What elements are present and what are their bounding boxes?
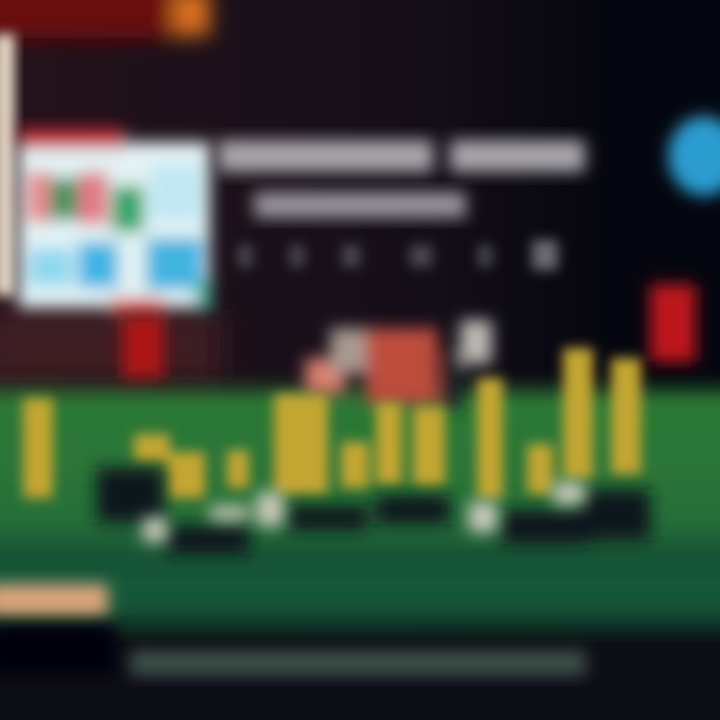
central figure [305, 320, 492, 408]
red block under panel [122, 316, 164, 378]
bar chart: yellow bars [23, 348, 641, 498]
footer: unreadable text bar [130, 650, 586, 676]
row of small icons [238, 240, 558, 270]
left pale strip [0, 34, 15, 296]
bottom-left black block [0, 624, 116, 676]
heading: unreadable title, line one [218, 140, 585, 172]
panel: colourful chart [18, 128, 212, 314]
dark players and shadows [97, 468, 650, 554]
reddish haze left of the scene [0, 310, 220, 380]
heading: unreadable title, line two [254, 192, 466, 218]
green field [0, 390, 720, 720]
top-left red glow [0, 0, 210, 38]
red block right [650, 284, 696, 362]
white flecks [143, 482, 585, 542]
icon: blue circle [668, 116, 720, 196]
bottom-left peach block [0, 584, 108, 616]
